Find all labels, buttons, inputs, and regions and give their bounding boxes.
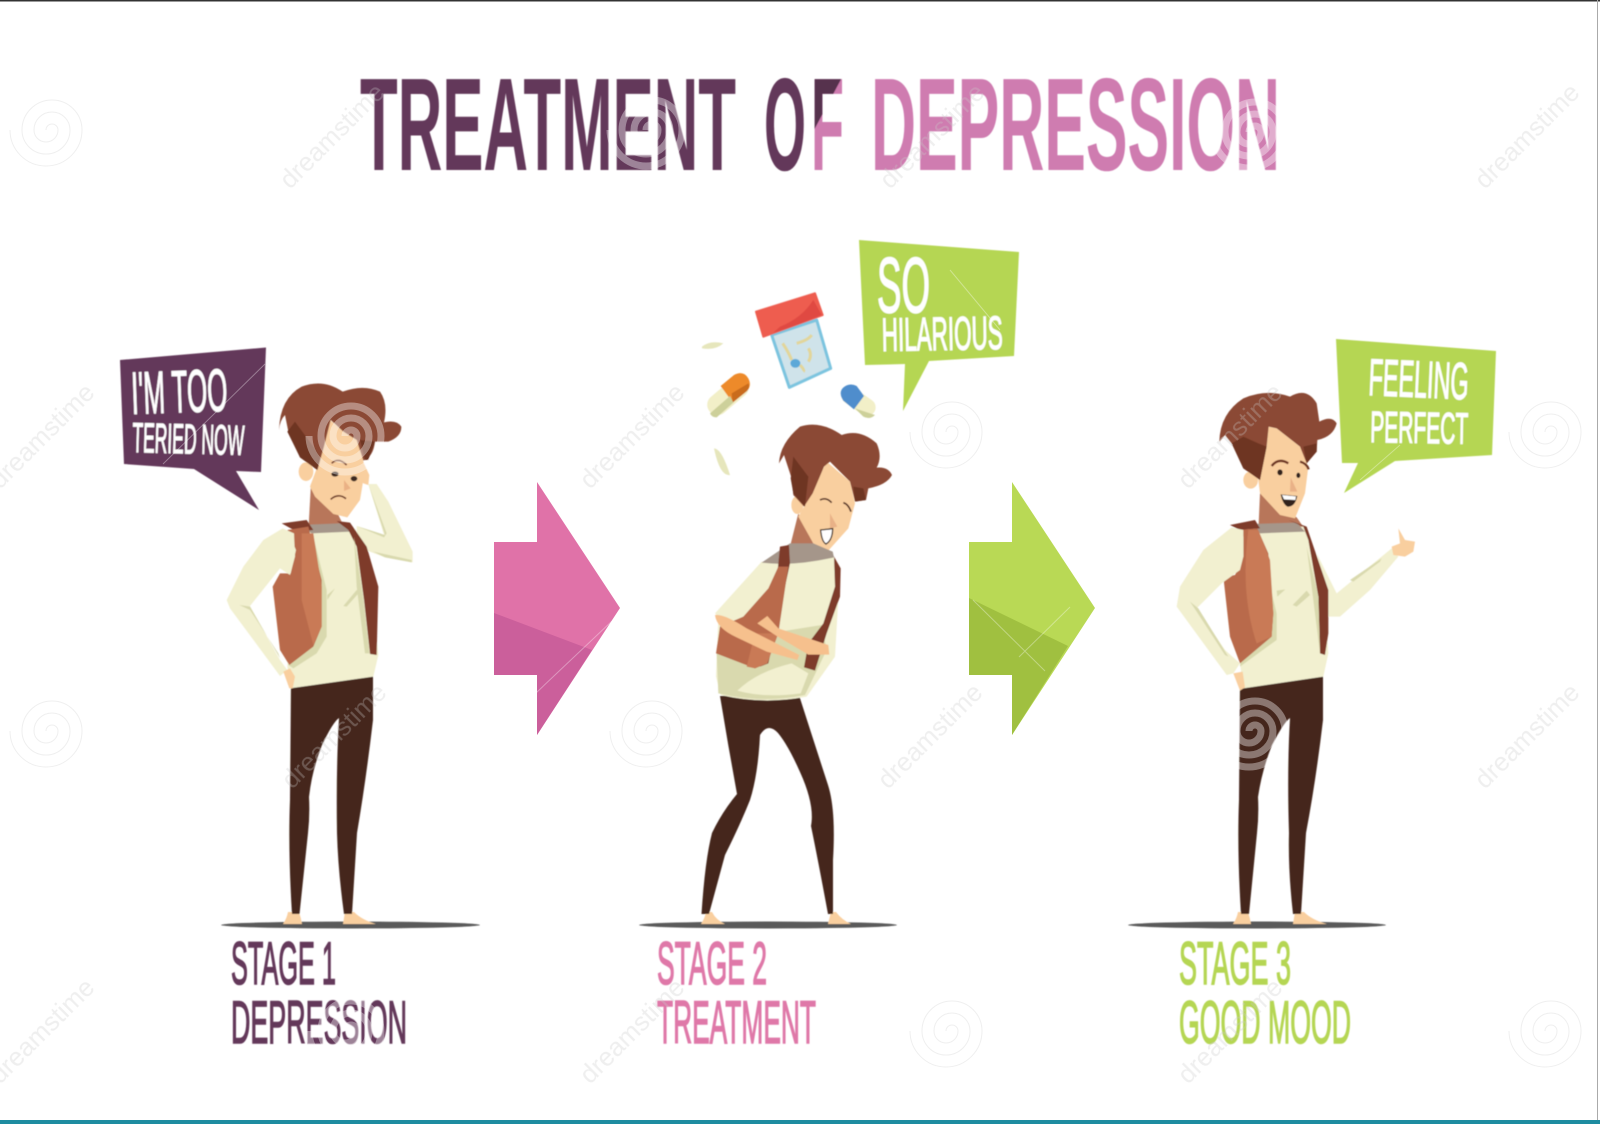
title	[360, 77, 1276, 172]
stage 1 label	[231, 930, 407, 1056]
title: O	[764, 51, 806, 198]
stage 3 label: STAGE 3	[1179, 930, 1291, 997]
speech bubble: feeling perfect: PERFECT	[1370, 403, 1469, 454]
icon: medicine jar	[756, 293, 831, 387]
arrow: pink stage 1 to stage 2	[494, 482, 620, 735]
bottom teal bar	[0, 1120, 1600, 1124]
infographic canvas: DEPRESSION	[231, 989, 407, 1056]
watermark cross lines	[163, 270, 1400, 693]
watermark text: dreamstime	[273, 77, 390, 194]
speech bubble: feeling perfect: FEELING	[1367, 349, 1470, 411]
infographic canvas: TREATMENT	[657, 989, 816, 1056]
stage 3 label	[1179, 930, 1351, 1056]
icon: orange capsule	[703, 373, 753, 419]
figure: stage 2 laughing man	[639, 293, 897, 928]
figure: stage 1 depressed man	[221, 383, 480, 928]
watermark text: dreamstime	[1171, 377, 1288, 494]
speech bubble: I'm too tired now	[120, 348, 266, 510]
icon: pill fragments	[702, 342, 730, 475]
stage 2 label: STAGE 2	[657, 930, 767, 997]
watermark text: dreamstime	[573, 377, 690, 494]
speech bubble: so hilarious: SO	[877, 241, 930, 329]
title: F	[811, 51, 844, 198]
icon: blue capsule	[838, 383, 879, 419]
figure: stage 3 happy man	[1128, 393, 1415, 928]
title: F	[811, 51, 844, 198]
speech bubble: I'm too tired now: I'M TOO	[130, 357, 228, 427]
arrow: green stage 2 to stage 3	[969, 482, 1095, 735]
speech bubble: feeling perfect	[1336, 339, 1496, 493]
watermark text: dreamstime	[1468, 677, 1585, 794]
speech bubble: so hilarious	[859, 240, 1019, 411]
watermark text: dreamstime	[275, 677, 392, 794]
watermark text: dreamstime	[1468, 77, 1585, 194]
infographic canvas: TERIED NOW	[132, 414, 245, 464]
speech bubble: so hilarious: HILARIOUS	[881, 306, 1003, 361]
watermark text: dreamstime	[871, 677, 988, 794]
stage 2 label	[657, 930, 816, 1056]
title: TREATMENT	[360, 51, 736, 198]
watermark text: dreamstime	[1171, 972, 1288, 1089]
watermark text: dreamstime	[873, 77, 990, 194]
stage 1 label: STAGE 1	[231, 930, 336, 997]
watermark text: dreamstime	[573, 972, 690, 1089]
infographic canvas: GOOD MOOD	[1179, 989, 1351, 1056]
